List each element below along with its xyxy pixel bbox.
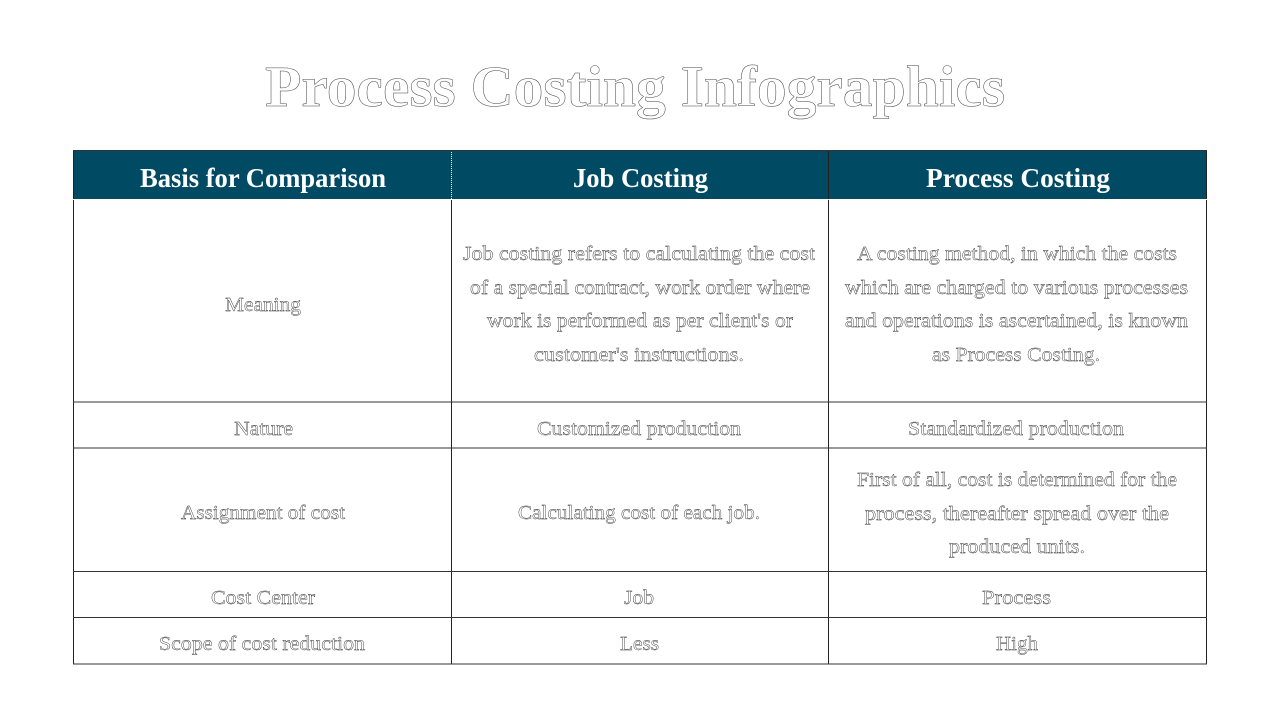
table header: [74, 150, 1206, 199]
row: meaning: work is performed as per client's or: [487, 310, 793, 332]
row: nature: [234, 418, 1124, 440]
header: basis for comparison: Basis for Comparison: [140, 163, 386, 193]
row: assignment of cost: Calculating cost of each job.: [518, 502, 760, 524]
row: assignment of cost: [181, 469, 1177, 558]
comparison table: [73, 150, 1207, 664]
row: cost center: [211, 587, 1051, 609]
header: process costing: Process Costing: [926, 163, 1110, 193]
title: Process Costing Infographics: [265, 54, 1005, 119]
row: meaning: and operations is ascertained, is known: [845, 310, 1188, 332]
row: scope of cost reduction: High: [996, 633, 1038, 655]
row: scope of cost reduction: [159, 633, 1038, 655]
row: assignment of cost: produced units.: [949, 536, 1085, 558]
row: meaning: customer's instructions.: [534, 344, 744, 366]
row: meaning: A costing method, in which the costs: [857, 243, 1177, 265]
row: cost center: Job: [624, 587, 654, 609]
row: cost center: Cost Center: [211, 587, 315, 609]
row: nature: Standardized production: [908, 418, 1124, 440]
row: scope of cost reduction: Less: [620, 633, 659, 655]
row: meaning: of a special contract, work order where: [470, 277, 810, 299]
row: scope of cost reduction: Scope of cost reduction: [159, 633, 365, 655]
table grid lines: [73, 150, 1207, 664]
header: job costing: Job Costing: [573, 163, 708, 193]
row: meaning: which are charged to various processes: [845, 277, 1188, 299]
row: cost center: Process: [982, 587, 1051, 609]
row: nature: Nature: [234, 418, 293, 440]
row: meaning: Job costing refers to calculating the cost: [463, 243, 815, 265]
row: nature: Customized production: [537, 418, 741, 440]
row: meaning: [225, 243, 1188, 366]
row: assignment of cost: First of all, cost is determined for the: [857, 469, 1177, 491]
row: assignment of cost: Assignment of cost: [181, 502, 345, 524]
row: meaning: as Process Costing.: [932, 344, 1100, 366]
row: meaning: Meaning: [225, 294, 301, 316]
row: assignment of cost: process, thereafter spread over the: [865, 503, 1169, 525]
